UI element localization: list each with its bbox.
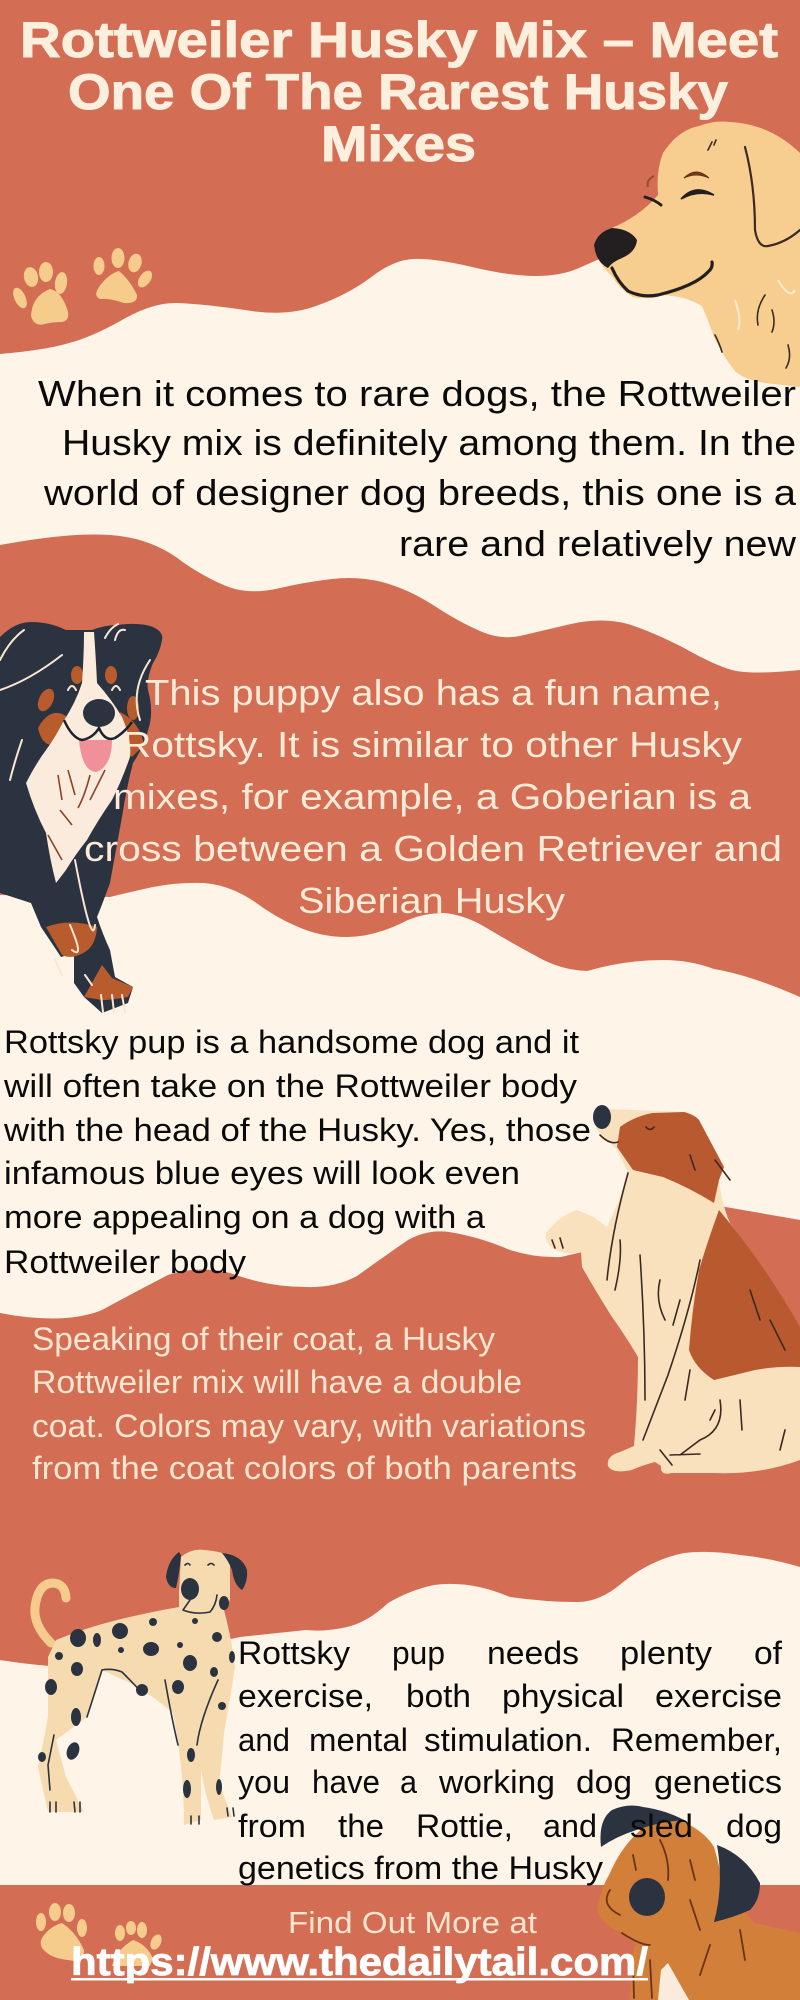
title: One Of The Rarest Husky <box>68 64 728 120</box>
text block: exercise: of <box>754 1635 782 1671</box>
text block: exercise: Remember, <box>611 1722 782 1758</box>
text block: coat: coat. Colors may vary, with variations <box>32 1408 586 1444</box>
icon: boxer dog <box>597 1806 800 2000</box>
text block: exercise: genetics <box>654 1764 782 1800</box>
text block: exercise: dog <box>576 1764 632 1800</box>
footer call to action: Find Out More at <box>288 1905 537 1940</box>
text block: exercise: exercise <box>655 1678 782 1714</box>
text block: body and head: will often take on the Rottweiler body <box>3 1068 577 1104</box>
footer band <box>0 1885 800 2000</box>
title <box>20 12 778 172</box>
text block: exercise: Rottsky <box>238 1635 350 1671</box>
text block: fun name <box>84 672 782 921</box>
text block: body and head: Rottsky pup is a handsome dog and it <box>4 1024 579 1060</box>
text block: exercise: plenty <box>620 1635 712 1671</box>
text block: coat: Speaking of their coat, a Husky <box>32 1321 495 1357</box>
icon: golden retriever <box>594 122 800 387</box>
lower wave band <box>0 1205 800 1668</box>
text block: intro <box>38 373 797 564</box>
text block: exercise: you <box>238 1764 290 1800</box>
text block: fun name: cross between a Golden Retriever and <box>84 828 782 869</box>
icon: footer paw prints <box>36 1903 164 1966</box>
text block: exercise: dog <box>726 1808 782 1844</box>
text block: exercise: and <box>543 1808 597 1844</box>
header wave band <box>0 0 800 354</box>
text block: exercise: both <box>406 1678 471 1714</box>
text block: exercise: needs <box>487 1635 579 1671</box>
text block: exercise: pup <box>392 1635 445 1671</box>
icon: bernese dog <box>0 622 162 1013</box>
text block: fun name: This puppy also has a fun name, <box>145 672 722 713</box>
text block: fun name: Siberian Husky <box>298 880 565 921</box>
text block: exercise: have <box>312 1764 380 1800</box>
text block: exercise: Rottie, <box>416 1808 513 1844</box>
text block: intro: world of designer dog breeds, this one is a <box>43 472 797 513</box>
text block: coat <box>32 1321 586 1486</box>
icon: top paw prints <box>10 248 155 325</box>
text block: body and head: infamous blue eyes will look even <box>4 1155 520 1191</box>
text block: body and head <box>3 1024 591 1280</box>
title: Mixes <box>321 116 476 172</box>
title: Rottweiler Husky Mix – Meet <box>20 12 778 68</box>
text block: body and head: Rottweiler body <box>4 1244 246 1280</box>
text block: body and head: more appealing on a dog with a <box>4 1199 485 1235</box>
text block: exercise: mental <box>309 1722 408 1758</box>
text block: fun name: mixes, for example, a Goberian is a <box>113 776 752 817</box>
text block: exercise: the <box>338 1808 384 1844</box>
text block: intro: When it comes to rare dogs, the Rottweiler <box>38 373 796 414</box>
text block: intro: Husky mix is definitely among them. In the <box>62 422 796 463</box>
text block: fun name: Rottsky. It is similar to other Husky <box>122 724 742 765</box>
middle wave band <box>0 534 800 997</box>
text block: coat: Rottweiler mix will have a double <box>32 1364 522 1400</box>
text block: exercise: and <box>238 1722 290 1758</box>
text block: body and head: with the head of the Husky. Yes, those <box>3 1112 591 1148</box>
icon: dalmatian <box>35 1550 247 1825</box>
text block: exercise: physical <box>502 1678 624 1714</box>
icon: sitting brown dog <box>546 1105 800 1474</box>
text block: exercise: genetics from the Husky <box>238 1850 603 1886</box>
text block: coat: from the coat colors of both parents <box>32 1450 577 1486</box>
text block: intro: rare and relatively new <box>399 523 797 564</box>
text block: exercise: from <box>238 1808 306 1844</box>
text block: exercise: a <box>400 1764 417 1800</box>
text block: exercise <box>238 1635 782 1886</box>
text block: exercise: exercise, <box>238 1678 373 1714</box>
footer link: https://www.thedailytail.com/ <box>71 1941 648 1984</box>
text block: exercise: sled <box>630 1808 693 1844</box>
text block: exercise: stimulation. <box>424 1722 592 1758</box>
text block: exercise: working <box>438 1764 555 1800</box>
